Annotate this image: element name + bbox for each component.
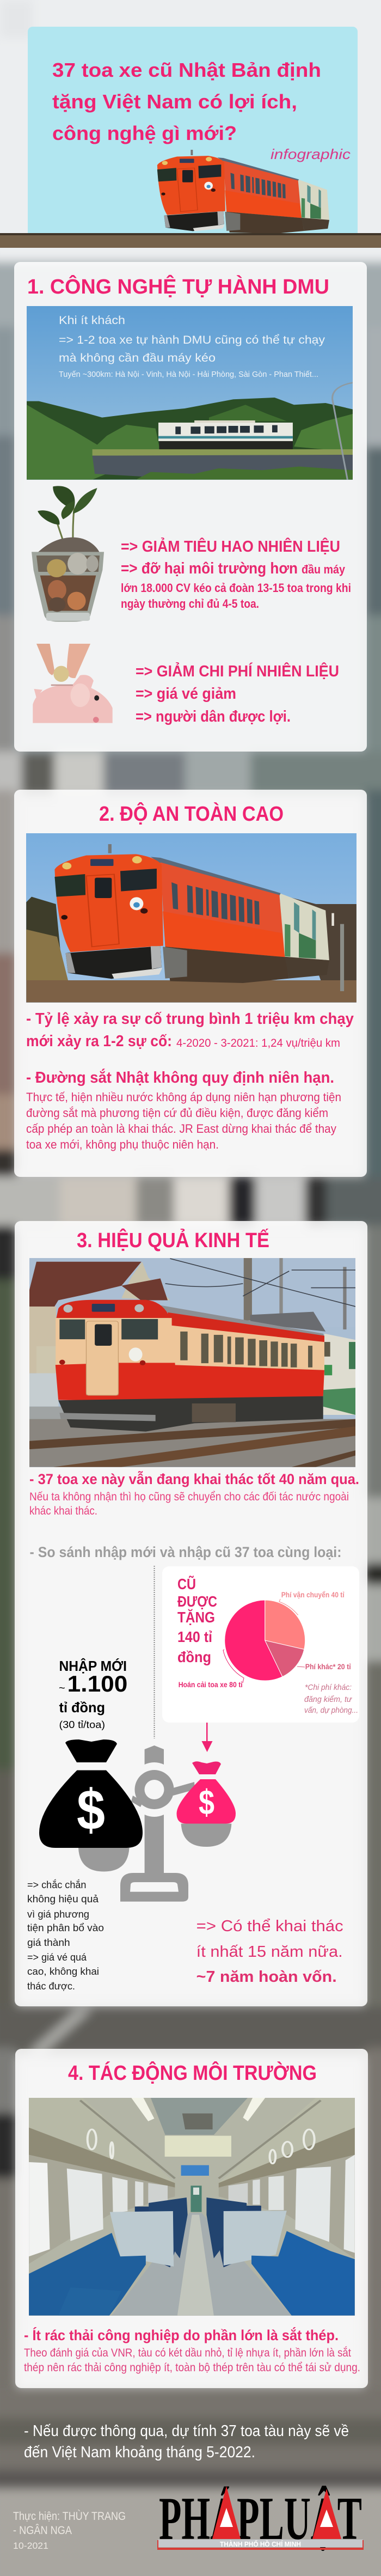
text: new import not efficient: tiện phân bổ vào: [27, 1922, 104, 1933]
label: new import cost: NHẬP MỚI: [59, 1658, 127, 1674]
text: reduced fuel consumption: lớn 18.000 CV kéo cả đoàn 13-15 toa trong khi: [121, 581, 351, 595]
panel: section 1 DMU technology: [14, 262, 367, 752]
text: payback conclusion: ít nhất 15 năm nữa.: [196, 1943, 343, 1961]
label: used donated 140 billion: 140 tỉ: [177, 1628, 212, 1645]
icon: balance scale with money bags: [39, 1739, 236, 1902]
text: incident rate: - Tỷ lệ xảy ra sự cố trung bình 1 triệu km chạy: [26, 1010, 354, 1028]
text: payback conclusion: => Có thể khai thác: [196, 1918, 343, 1935]
text: no service life limit: Thực tế, hiện nhiều nước không áp dụng niên hạn phương tiện: [26, 1090, 341, 1104]
text: 40 years in service: khác khai thác.: [29, 1505, 97, 1517]
panel: section 2 high safety: [14, 790, 367, 1177]
photo overlay text: => 1-2 toa xe tự hành DMU cũng có thể tự chạy: [59, 334, 325, 346]
heading 1: 1. CÔNG NGHỆ TỰ HÀNH DMU: [27, 274, 329, 298]
photo overlay text: Tuyến ~300km: Hà Nội - Vinh, Hà Nội - Hải Phòng, Sài Gòn - Phan Thiết...: [59, 370, 318, 379]
text: reduced fuel consumption: => GIẢM TIÊU HAO NHIÊN LIỆU: [121, 537, 340, 556]
text: 40 years in service: - 37 toa xe này vẫn đang khai thác tốt 40 năm qua.: [29, 1470, 359, 1487]
text: new import not efficient: vì giá phương: [27, 1909, 89, 1920]
arrow down to pink bag: [201, 1723, 212, 1752]
text: new import not efficient: => chắc chắn: [27, 1879, 86, 1890]
pie footnote: *Chi phí khác:: [305, 1683, 352, 1692]
panel: section 4 environmental impact: [15, 2049, 368, 2388]
photo overlay text: mà không cần đầu máy kéo: [59, 352, 216, 364]
text: no service life limit: đường sắt mà phương tiện cứ đủ điều kiện, được đăng kiểm: [26, 1106, 328, 1120]
text: reduced fuel consumption: [121, 537, 351, 611]
label: used donated 140 billion: ĐƯỢC: [177, 1593, 217, 1610]
label: used donated 140 billion: [177, 1576, 217, 1665]
text: little industrial waste: Theo đánh giá của VNR, tàu có két dầu nhỏ, tỉ lệ nhựa ít, phần lớn là sắt: [24, 2347, 351, 2359]
text: reduced fuel cost: => GIẢM CHI PHÍ NHIÊN LIỆU: [136, 662, 339, 680]
label: new import cost: 1.100: [67, 1671, 127, 1696]
main title: công nghệ gì mới?: [52, 122, 237, 144]
heading 3: 3. HIỆU QUẢ KINH TẾ: [77, 1228, 269, 1252]
icon: balance scale with money bags: $: [77, 1778, 105, 1842]
credits: Thực hiện: THÙY TRANG: [13, 2510, 126, 2523]
label: new import cost: (30 tỉ/toa): [59, 1719, 105, 1730]
text: incident rate: [26, 1010, 354, 1050]
main title: [52, 59, 321, 144]
text: no service life limit: cấp phép an toàn là khai thác. JR East dừng khai thác để thay: [26, 1122, 336, 1136]
text: new import not efficient: giá thành: [27, 1937, 70, 1948]
icon: balance scale with money bags: $: [199, 1783, 214, 1822]
photo: white DMU train in green hills: [27, 306, 353, 480]
photo overlay text: [59, 314, 325, 379]
divider dotted line: [153, 1566, 155, 1738]
hero panel: [0, 27, 381, 248]
pie labels: Phí vận chuyển 40 tỉ: [281, 1590, 345, 1599]
label: new import cost: tỉ đồng: [59, 1699, 105, 1716]
text: little industrial waste: - Ít rác thải công nghiệp do phần lớn là sắt thép.: [24, 2327, 339, 2343]
icon: coin into piggy bank: [33, 644, 113, 723]
text: payback conclusion: [196, 1918, 343, 1986]
pie labels: Hoán cải toa xe 80 tỉ: [179, 1680, 243, 1689]
text: no service life limit: toa xe mới, không phụ thuộc niên hạn.: [26, 1138, 219, 1151]
icon: plant growing from glass of coins: [32, 486, 104, 622]
pie labels: [179, 1590, 351, 1689]
label: used donated 140 billion: đồng: [177, 1649, 211, 1665]
text: reduced fuel consumption: ngày thường chỉ đủ 4-5 toa.: [121, 597, 259, 611]
credits: [13, 2510, 126, 2551]
text: reduced fuel cost: [136, 662, 339, 725]
text: little industrial waste: [24, 2327, 360, 2374]
text: reduced fuel cost: => giá vé giảm: [136, 685, 236, 703]
infographic tag: infographic: [271, 146, 351, 162]
label: new import cost: [59, 1658, 127, 1730]
text: no service life limit: - Đường sắt Nhật không quy định niên hạn.: [26, 1068, 334, 1086]
track ground strip: [0, 233, 381, 248]
heading 2: 2. ĐỘ AN TOÀN CAO: [99, 801, 284, 826]
panel: section 3 economic efficiency: [15, 1221, 367, 2006]
text: new import not efficient: [27, 1879, 104, 1992]
text: new import not efficient: thác được.: [27, 1981, 75, 1992]
pie chart: [225, 1600, 305, 1681]
photo: red and cream train: [29, 1258, 355, 1467]
credits: - NGÂN NGA: [13, 2524, 72, 2537]
text: 40 years in service: Nếu ta không nhận thì họ cũng sẽ chuyển cho các đối tác nước ngoài: [29, 1491, 349, 1503]
pie footnote: đăng kiểm, tư: [304, 1695, 352, 1704]
label: used donated 140 billion: CŨ: [177, 1576, 196, 1592]
text: incident rate: 4-2020 - 3-2021: 1,24 vụ/triệu km: [176, 1037, 340, 1049]
pie leader lines: [223, 1599, 305, 1683]
photo: train interior with blue seats: [29, 2098, 355, 2316]
closing note: [24, 2422, 349, 2461]
panel: used train cost pie chart: [162, 1566, 359, 1723]
closing note: đến Việt Nam khoảng tháng 5-2022.: [24, 2444, 255, 2461]
text: reduced fuel cost: => người dân được lợi.: [136, 708, 291, 725]
text: new import not efficient: => giá vé quá: [27, 1952, 87, 1963]
text: no service life limit: [26, 1068, 341, 1151]
text: new import not efficient: không hiệu quả: [27, 1894, 99, 1904]
text: reduced fuel consumption: => đỡ hại môi trường hơn: [121, 560, 298, 577]
photo: orange train: [26, 833, 357, 1003]
closing note: - Nếu được thông qua, dự tính 37 toa tàu này sẽ về: [24, 2422, 349, 2440]
hero train: [157, 150, 329, 234]
label: used donated 140 billion: TẶNG: [177, 1609, 215, 1626]
credits: 10-2021: [13, 2541, 48, 2551]
pie footnote: [304, 1683, 358, 1715]
comparison subheading: - So sánh nhập mới và nhập cũ 37 toa cùng loại:: [29, 1544, 342, 1560]
photo overlay text: Khi ít khách: [59, 314, 125, 327]
main title: tặng Việt Nam có lợi ích,: [52, 90, 297, 113]
heading 4: 4. TÁC ĐỘNG MÔI TRƯỜNG: [68, 2060, 317, 2085]
text: reduced fuel consumption: đầu máy: [302, 563, 346, 576]
pie labels: Phí khác* 20 tỉ: [305, 1662, 351, 1671]
logo: Pháp Luật: THÀNH PHỐ HỒ CHÍ MINH: [220, 2540, 301, 2548]
pie footnote: vấn, dự phòng...: [304, 1706, 358, 1715]
text: new import not efficient: cao, không khai: [27, 1966, 99, 1977]
text: payback conclusion: ~7 năm hoàn vốn.: [196, 1968, 337, 1986]
text: 40 years in service: [29, 1470, 359, 1517]
main title: 37 toa xe cũ Nhật Bản định: [52, 59, 321, 81]
text: incident rate: mới xảy ra 1-2 sự cố:: [26, 1033, 172, 1050]
label: new import cost: ~: [59, 1682, 65, 1694]
